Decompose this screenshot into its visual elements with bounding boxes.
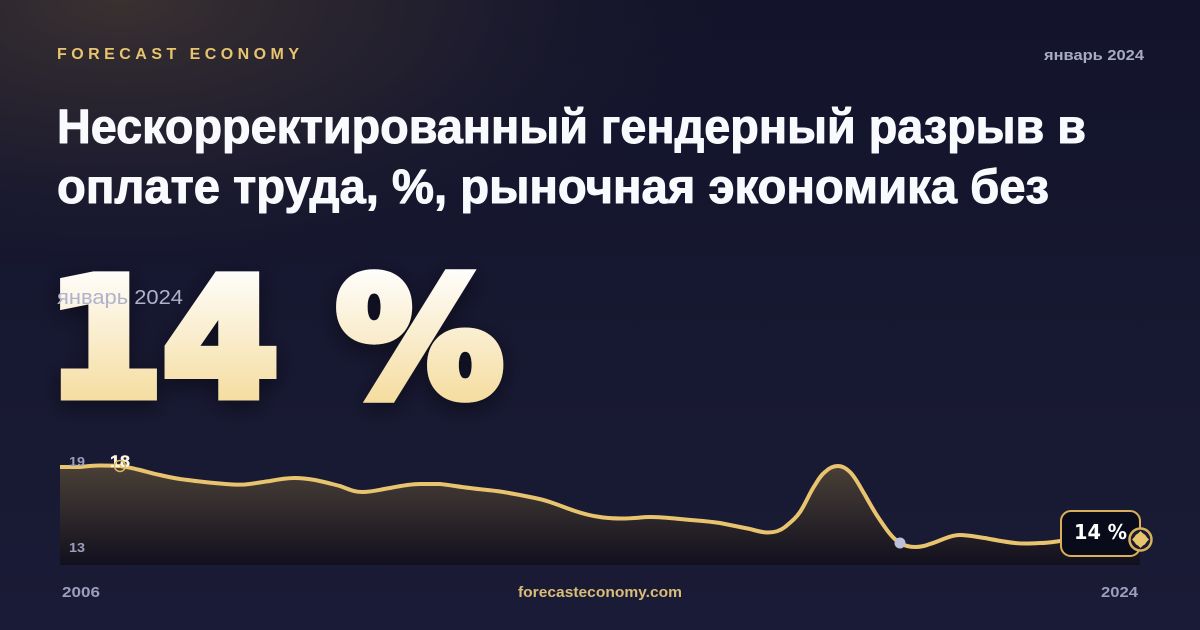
- date top right: январь 2024: [1044, 47, 1145, 64]
- current value callout: 14 %: [1074, 520, 1127, 544]
- date subtitle: январь 2024: [57, 287, 183, 309]
- max point label: 18: [110, 452, 130, 471]
- chart line: [60, 466, 1140, 547]
- x axis start year: 2006: [62, 585, 100, 601]
- chart area: [60, 466, 1140, 565]
- min point marker: [894, 538, 906, 548]
- title: оплате труда, %, рыночная экономика без: [57, 161, 1049, 214]
- big value: 14 %: [47, 246, 503, 434]
- title: [57, 101, 1086, 214]
- current point marker: [1130, 528, 1152, 550]
- y axis max label: 19: [69, 454, 85, 469]
- line chart: [60, 452, 1152, 565]
- x axis end year: 2024: [1101, 585, 1138, 601]
- brand label: FORECAST ECONOMY: [57, 46, 299, 63]
- title: Нескорректированный гендерный разрыв в: [57, 101, 1086, 154]
- y axis min label: 13: [69, 540, 85, 555]
- max point marker: [114, 460, 126, 472]
- current value callout: [1061, 511, 1140, 556]
- source url: forecasteconomy.com: [518, 585, 682, 601]
